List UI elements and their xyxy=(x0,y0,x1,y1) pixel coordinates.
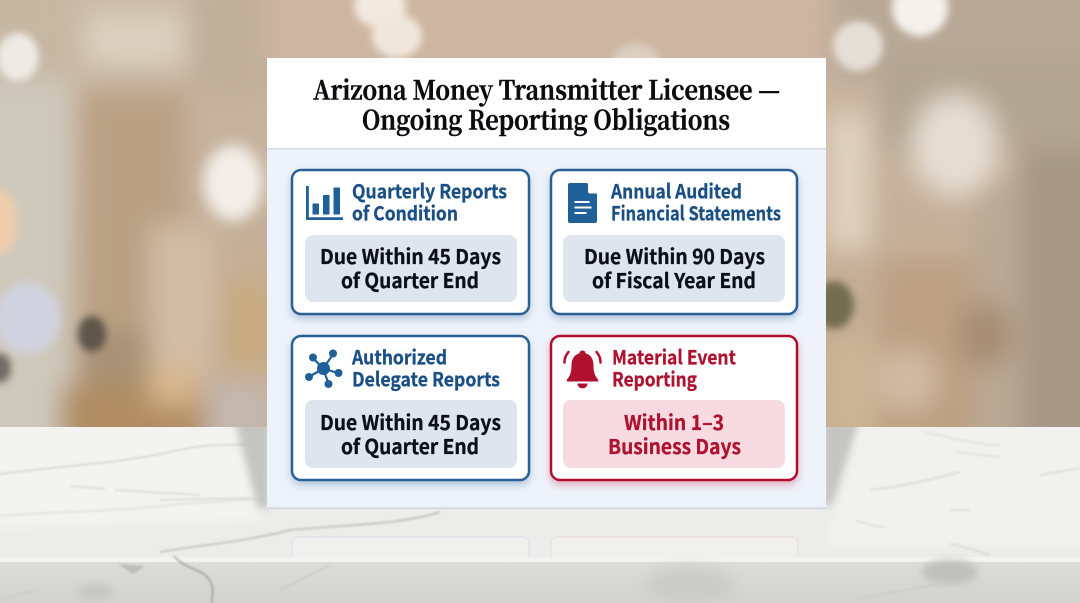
icon: network xyxy=(305,350,342,388)
heading xyxy=(610,176,781,226)
counter front edge xyxy=(0,556,1080,603)
deadline box: of Quarter End xyxy=(341,430,479,460)
deadline box: Due Within 90 Days xyxy=(584,240,765,270)
title: Ongoing Reporting Obligations xyxy=(362,100,730,138)
deadline box: Due Within 45 Days xyxy=(320,406,501,436)
icon: document xyxy=(568,183,597,223)
header band xyxy=(267,58,826,150)
panel: annual audited statements xyxy=(551,170,797,314)
marble countertop xyxy=(0,420,1080,603)
deadline box xyxy=(305,235,517,302)
deadline box xyxy=(305,400,517,468)
card reflection on marble xyxy=(292,537,798,557)
deadline box: Within 1–3 xyxy=(624,406,724,436)
icon: bell xyxy=(564,350,600,388)
panel: authorized delegate reports xyxy=(292,336,529,480)
heading: Annual Audited xyxy=(610,176,742,204)
marble veins xyxy=(0,432,1080,555)
heading: of Condition xyxy=(352,198,458,226)
deadline box xyxy=(563,400,785,468)
panel: quarterly reports xyxy=(292,170,529,314)
blurred interior background xyxy=(0,0,1080,427)
heading: Delegate Reports xyxy=(352,364,500,392)
icon: bar chart xyxy=(306,186,343,220)
heading: Quarterly Reports xyxy=(352,176,507,204)
deadline box xyxy=(563,235,785,302)
deadline box: of Quarter End xyxy=(341,264,479,294)
heading: Financial Statements xyxy=(611,198,781,226)
deadline box: of Fiscal Year End xyxy=(592,264,756,294)
panel: material event reporting xyxy=(551,336,797,480)
heading xyxy=(612,342,736,392)
heading: Authorized xyxy=(351,342,447,370)
title xyxy=(313,70,780,138)
deadline box: Business Days xyxy=(608,430,741,460)
heading xyxy=(352,176,507,226)
heading: Material Event xyxy=(612,342,736,370)
deadline box: Due Within 45 Days xyxy=(320,240,501,270)
infographic board xyxy=(267,58,826,509)
heading: Reporting xyxy=(612,364,697,392)
heading xyxy=(351,342,500,392)
title: Arizona Money Transmitter Licensee — xyxy=(313,70,780,108)
